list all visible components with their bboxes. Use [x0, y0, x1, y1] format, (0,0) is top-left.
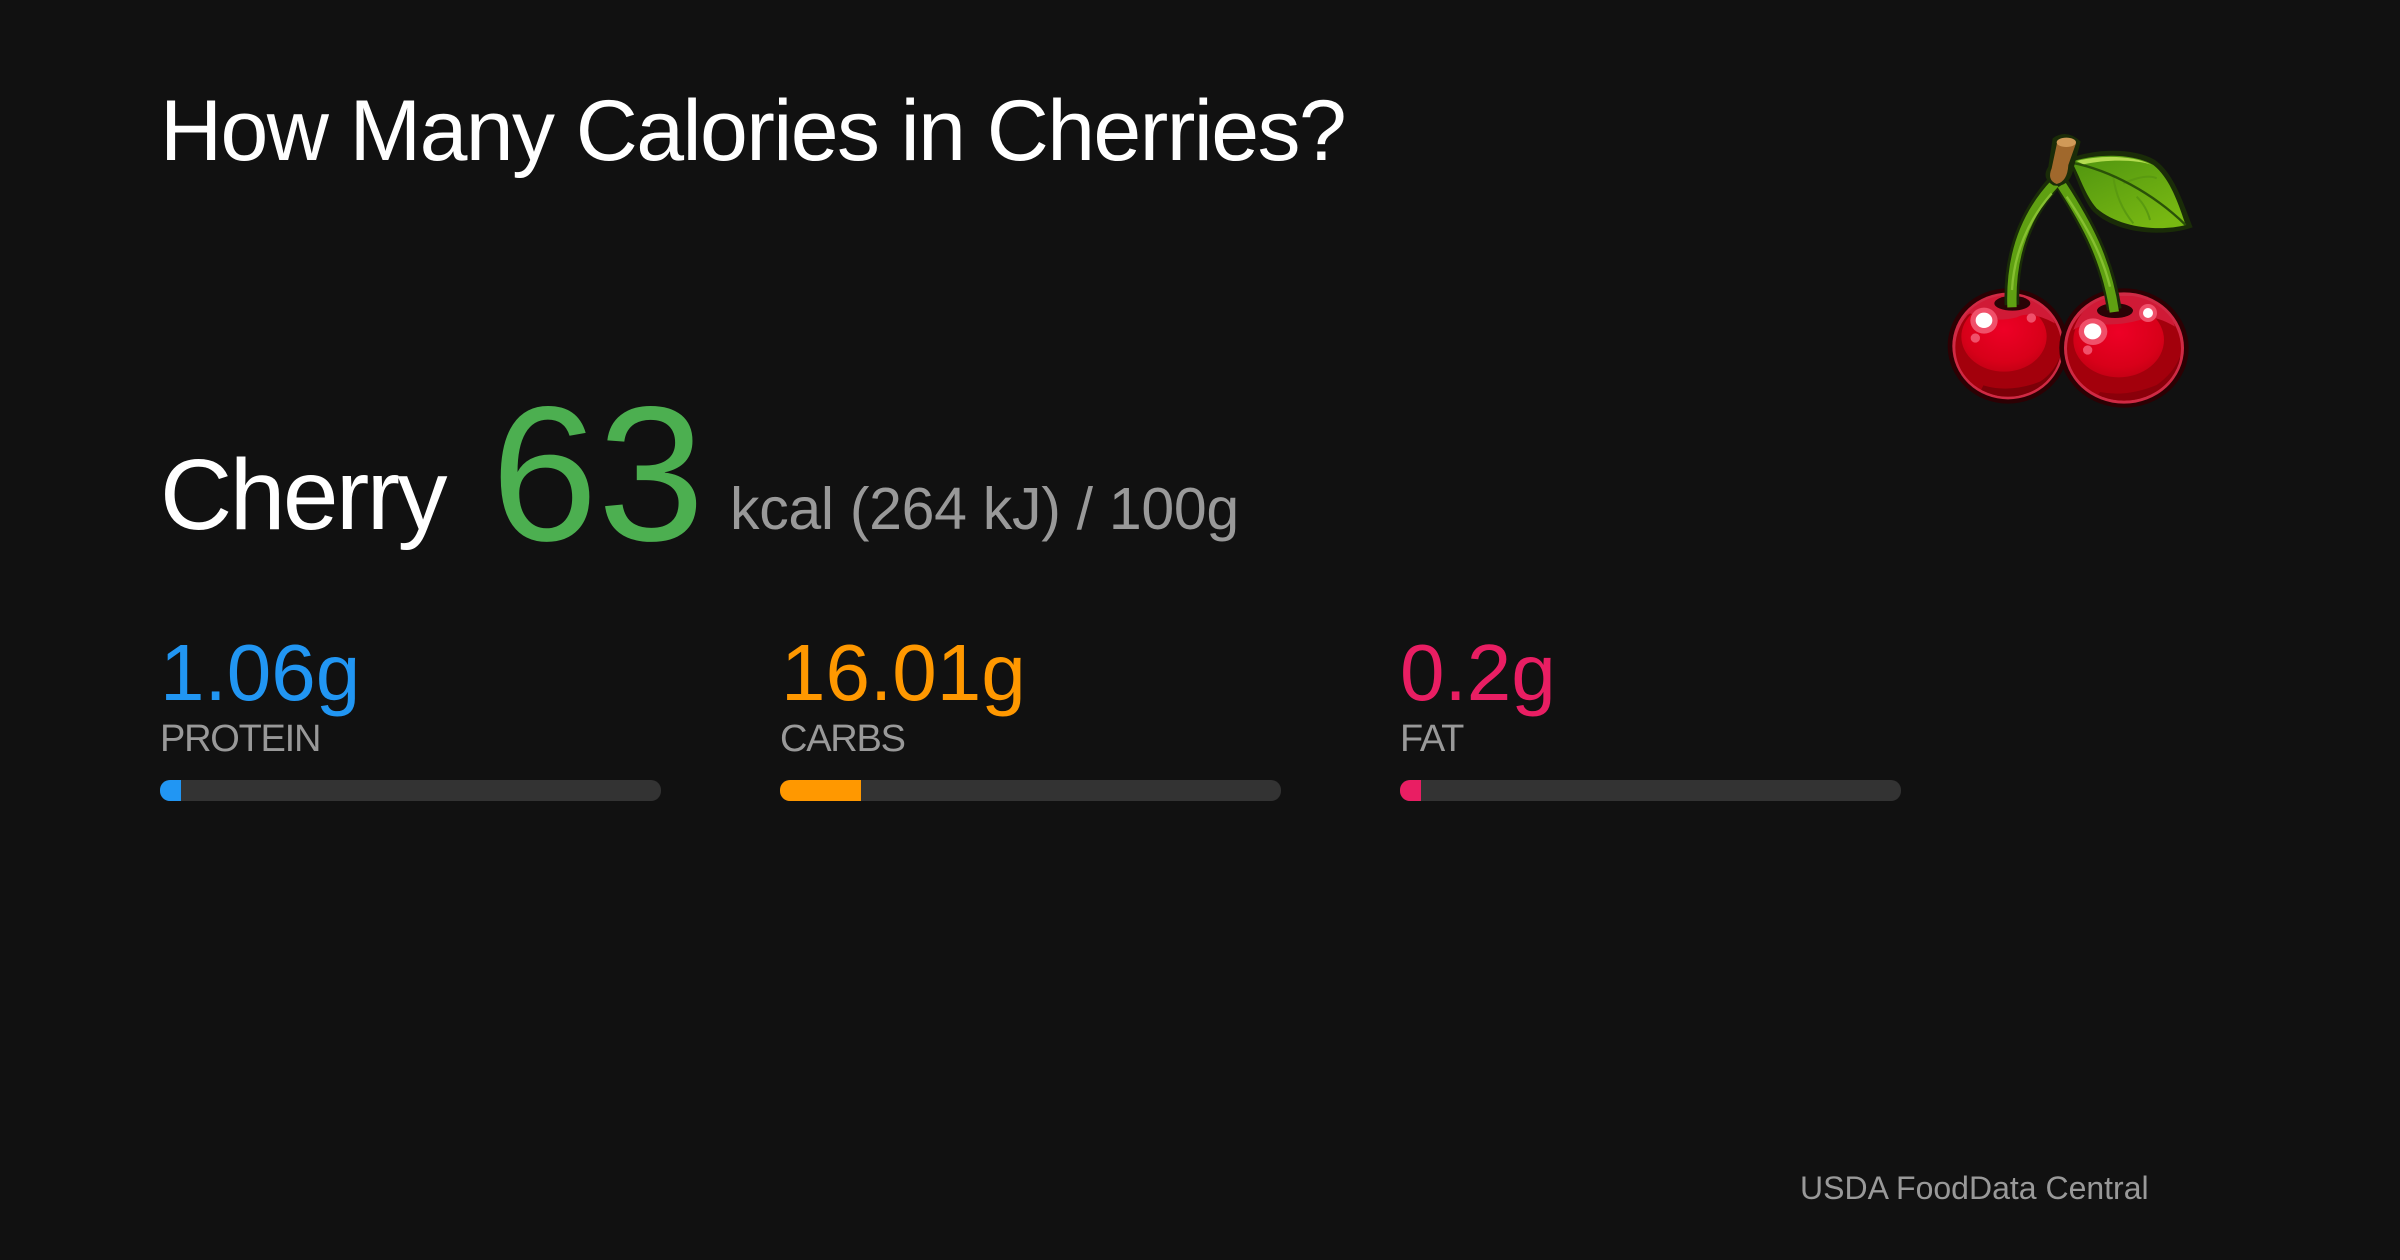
food name: Cherry: [160, 439, 445, 551]
left cherry: [1948, 288, 2068, 404]
carbs label: CARBS: [780, 718, 905, 760]
stem cap: [2045, 134, 2081, 186]
title: How Many Calories in Cherries?: [160, 83, 1345, 179]
fat label: FAT: [1400, 718, 1463, 760]
leaf: [2067, 151, 2193, 233]
fat bar: [1400, 780, 1901, 801]
icon: cherries: [1948, 134, 2192, 408]
calorie value: 63: [491, 366, 705, 581]
carbs value: 16.01g: [781, 628, 1026, 717]
protein label: PROTEIN: [160, 718, 320, 760]
carbs bar: [780, 780, 1281, 801]
protein value: 1.06g: [160, 628, 360, 717]
calorie unit: kcal (264 kJ) / 100g: [730, 476, 1239, 542]
protein bar: [160, 780, 661, 801]
stems: [2012, 182, 2114, 312]
source credit: USDA FoodData Central: [1800, 1170, 2149, 1206]
right cherry: [2059, 288, 2189, 408]
fat value: 0.2g: [1400, 628, 1556, 717]
